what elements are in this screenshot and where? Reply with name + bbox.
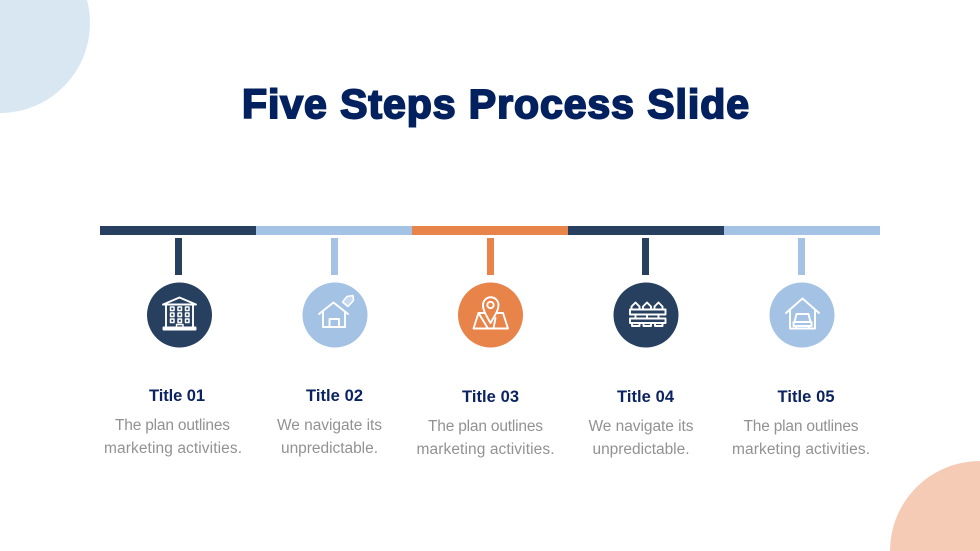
icon: apartment building <box>163 298 196 330</box>
decorative circle: top left <box>0 0 90 113</box>
step 4 text <box>588 418 694 458</box>
step 5 text: The plan outlines <box>744 418 859 435</box>
step 2 text <box>277 417 382 457</box>
icon: fence <box>630 302 666 326</box>
step 3 text: The plan outlines <box>428 418 543 435</box>
step 2 <box>277 238 382 457</box>
timeline bar <box>100 226 880 235</box>
step 2 text: unpredictable. <box>281 440 378 457</box>
step 5 <box>732 238 870 458</box>
step 4 <box>588 238 694 458</box>
step 3 text: marketing activities. <box>416 441 554 458</box>
step 1 heading: Title 01 <box>149 387 205 405</box>
step 5 text: marketing activities. <box>732 441 870 458</box>
step 4 text: unpredictable. <box>592 441 690 458</box>
step 3 text <box>416 418 554 458</box>
step 4 text: We navigate its <box>588 418 694 435</box>
title: Five Steps Process Slide <box>242 81 749 127</box>
step 1 text <box>104 417 242 457</box>
decorative circle: bottom right <box>890 461 980 551</box>
step 1 text: marketing activities. <box>104 440 242 457</box>
step 2 text: We navigate its <box>277 417 382 434</box>
step 5 text <box>732 418 870 458</box>
step 2 heading: Title 02 <box>306 387 363 405</box>
icon: house with tag <box>319 296 354 327</box>
step 4 heading: Title 04 <box>617 388 675 406</box>
icon: garage with car <box>786 298 819 328</box>
step 3 heading: Title 03 <box>462 388 519 406</box>
icon: map with pin <box>474 297 508 328</box>
step 3 <box>416 238 554 458</box>
step 1 <box>104 238 242 457</box>
step 1 text: The plan outlines <box>115 417 230 434</box>
step 5 heading: Title 05 <box>778 388 834 406</box>
